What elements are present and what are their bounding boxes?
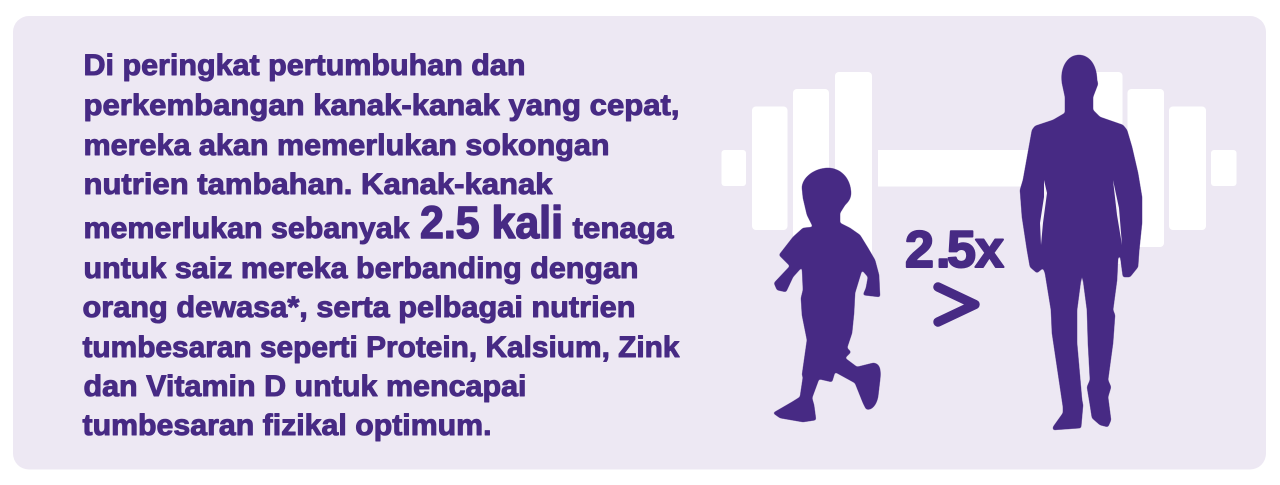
- text block: body paragraph: perkembangan kanak-kanak yang cepat,: [84, 89, 680, 122]
- text block: body paragraph: mereka akan memerlukan sokongan: [84, 129, 610, 162]
- icon: greater-than sign: [938, 287, 975, 322]
- text block: body paragraph: nutrien tambahan. Kanak-kanak: [84, 168, 553, 201]
- text block: body paragraph: 2.5 kali: [420, 197, 563, 248]
- text block: body paragraph: untuk saiz mereka berbanding dengan: [84, 252, 638, 285]
- text block: body paragraph: memerlukan sebanyak: [84, 212, 410, 245]
- text block: body paragraph: dan Vitamin D untuk mencapai: [84, 370, 526, 403]
- icon: barbell: [722, 72, 1236, 264]
- text block: body paragraph: tumbesaran fizikal optimum.: [82, 409, 492, 442]
- label: 2.5x: 2.5x: [905, 221, 1004, 279]
- text block: body paragraph: [82, 49, 680, 442]
- text block: body paragraph: tumbesaran seperti Protein, Kalsium, Zink: [82, 331, 680, 364]
- icon: adult man silhouette: [1020, 55, 1142, 430]
- text block: body paragraph: Di peringkat pertumbuhan dan: [84, 49, 526, 82]
- text block: body paragraph: tenaga: [572, 212, 674, 245]
- detail: gap between right arm and jacket: [1113, 180, 1122, 245]
- text block: body paragraph: orang dewasa*, serta pelbagai nutrien: [82, 291, 636, 324]
- icon: child silhouette: [773, 168, 880, 422]
- detail: gap between left arm and jacket: [1040, 180, 1047, 245]
